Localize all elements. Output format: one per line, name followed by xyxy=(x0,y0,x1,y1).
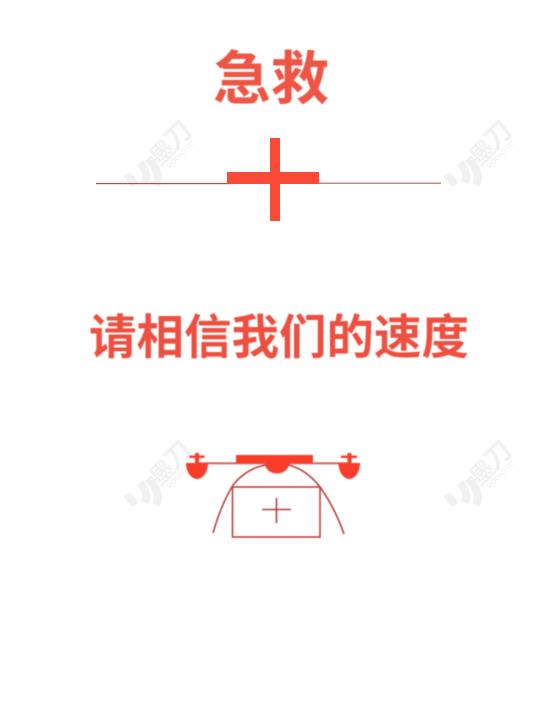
icon: medical cross on horizon line xyxy=(96,138,441,221)
watermark: top left: 刀 xyxy=(158,115,198,155)
drone body xyxy=(236,455,313,464)
watermark: top right: MODAO.CC xyxy=(486,140,516,170)
watermark: bottom right: 刀 xyxy=(478,435,518,475)
watermark: top left: MODAO.CC xyxy=(166,140,196,170)
first-aid box xyxy=(232,487,320,537)
drone arms xyxy=(195,462,350,464)
watermark: bottom left: 墨 xyxy=(145,455,181,491)
watermark: bottom left: 刀 xyxy=(158,435,198,475)
icon: delivery drone carrying first-aid box xyxy=(186,453,360,537)
subtitle: 请相信我们的速度 xyxy=(89,312,469,365)
watermark: top right: 刀 xyxy=(478,115,518,155)
parachute arc xyxy=(213,465,344,534)
center camera dome xyxy=(265,463,289,474)
left rotor xyxy=(186,453,208,479)
title: 急救 xyxy=(213,47,329,112)
watermark: bottom left xyxy=(127,435,198,505)
watermark: top left xyxy=(127,115,198,185)
watermark: top right: 墨 xyxy=(465,135,501,171)
box plus sign xyxy=(262,498,291,523)
watermark: bottom left: MODAO.CC xyxy=(166,460,196,490)
watermark: top right xyxy=(447,115,518,185)
watermark: bottom right xyxy=(447,435,518,505)
watermark: bottom right: MODAO.CC xyxy=(486,460,516,490)
right rotor xyxy=(338,453,360,479)
watermark: bottom right: 墨 xyxy=(465,455,501,491)
watermark: top left: 墨 xyxy=(145,135,181,171)
